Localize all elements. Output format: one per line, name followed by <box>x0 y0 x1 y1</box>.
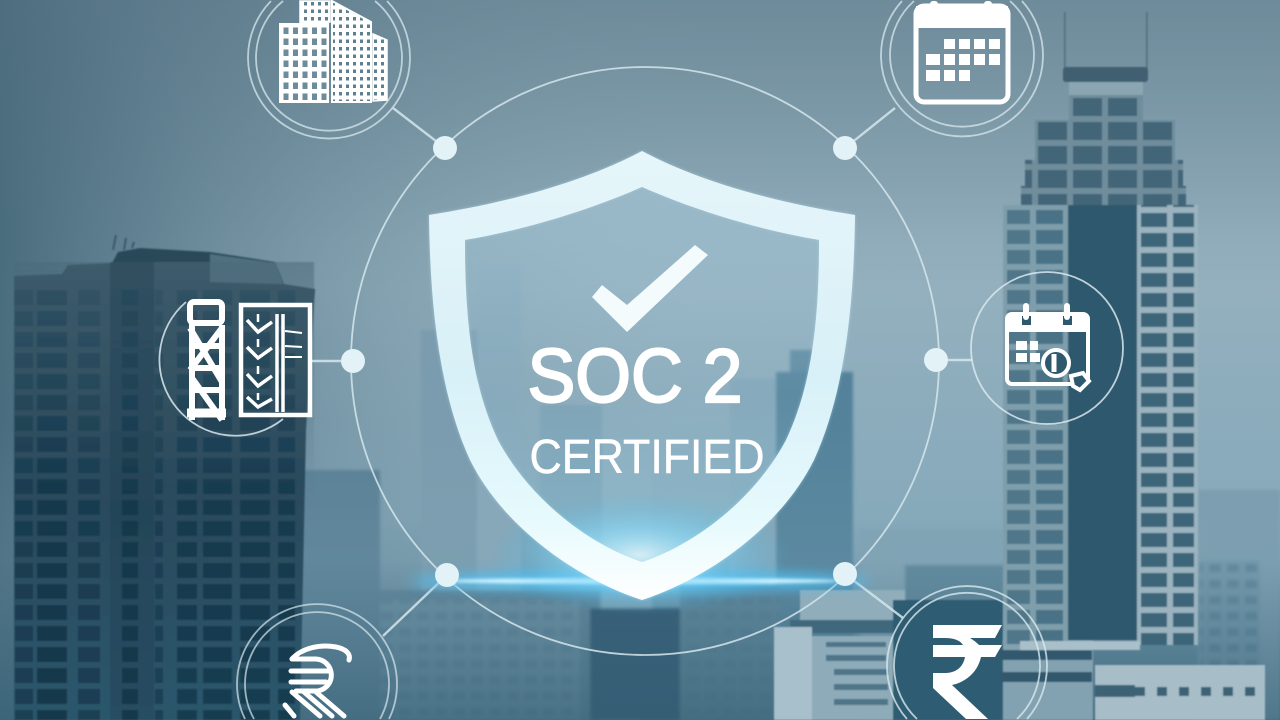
icon circle: buildings <box>248 1 410 139</box>
right flow panel <box>241 305 310 415</box>
shield interior tint <box>465 187 819 562</box>
shield outline <box>429 151 855 600</box>
heading: SOC 2: SOC 2 <box>528 334 742 419</box>
light flare under shield <box>410 495 870 615</box>
building: right tower <box>1003 12 1265 720</box>
haze overlay <box>0 420 1280 720</box>
icon circle: process chart <box>159 302 310 436</box>
bottom darkening <box>0 560 1280 720</box>
building: left tower <box>14 235 315 720</box>
foreground low-rise buildings <box>774 590 1093 720</box>
icon circle: rupee <box>887 586 1047 719</box>
checkmark <box>592 245 708 332</box>
network: main ring and connectors <box>312 67 972 655</box>
icon circle: calendar support <box>971 272 1123 424</box>
left scaffold glyph <box>187 302 226 420</box>
shield emblem <box>429 151 855 600</box>
node dots <box>341 136 948 587</box>
icon circle: R currency <box>237 604 397 719</box>
background: distant skyline <box>300 266 1280 720</box>
shield glow <box>429 151 855 600</box>
icon circle: calendar <box>881 1 1043 136</box>
subheading: CERTIFIED: CERTIFIED <box>530 431 764 484</box>
rupee glyph <box>933 625 1002 719</box>
